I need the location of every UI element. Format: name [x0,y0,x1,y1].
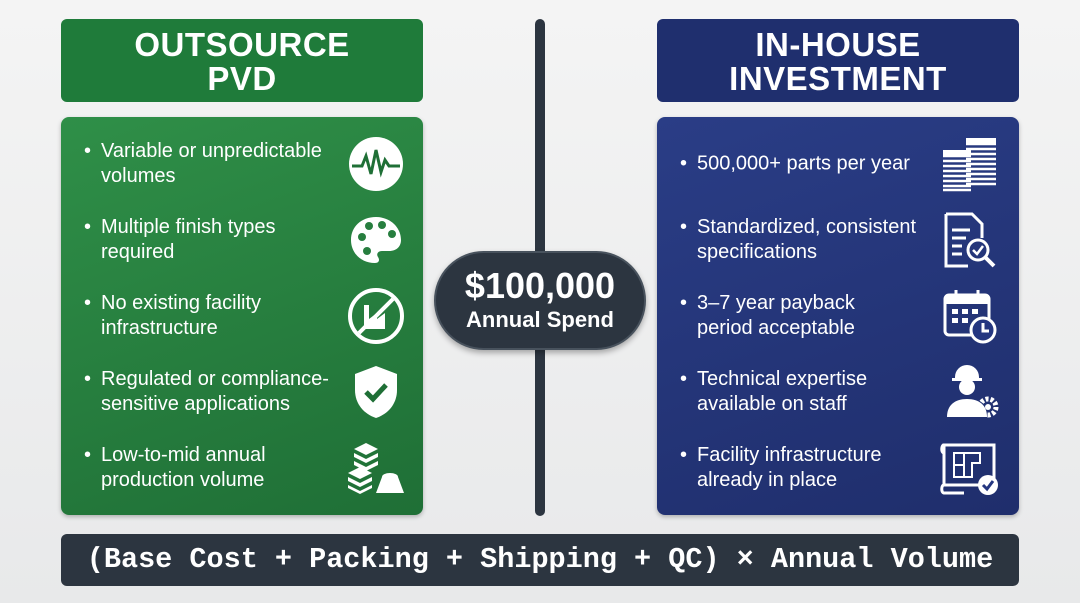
item: regulated: sensitive applications [101,393,290,415]
item: multiple finishes: Multiple finish types [101,216,276,238]
item: low-to-mid volume [84,443,404,494]
item: facility in place [680,444,998,495]
item: variable volumes: Variable or unpredictable [101,140,322,162]
icon: blueprint [940,444,998,495]
item: technical expertise: Technical expertise [697,368,867,390]
item: 500k parts [680,138,996,192]
panel: outsource [61,117,423,515]
panel: in-house [657,117,1019,515]
item: facility in place: already in place [697,469,837,491]
icon: shield [355,366,397,418]
item: payback: 3–7 year payback [697,292,855,314]
header: outsource: OUTSOURCE [134,26,350,63]
callout: annual spend pill: $100,000 [465,265,615,306]
icon: stacks [348,443,404,494]
header: in-house [657,19,1019,102]
item: payback [680,290,996,344]
icon: no factory [348,288,404,344]
item: no facility: No existing facility [101,292,261,314]
icon: document check [944,212,996,268]
item: variable volumes [84,137,403,191]
item: low-to-mid volume: Low-to-mid annual [101,444,266,466]
item: regulated: Regulated or compliance- [101,368,329,390]
item: multiple finishes: required [101,241,174,263]
header: outsource [61,19,423,102]
item: payback: period acceptable [697,317,855,339]
formula bar: (Base Cost + Packing + Shipping + QC) × Annual Volume [87,543,993,576]
icon: pulse [349,137,403,191]
icon: engineer [947,365,998,418]
item: variable volumes: volumes [101,165,175,187]
header: in-house: IN-HOUSE [755,26,921,63]
header: outsource: PVD [207,60,277,97]
item: technical expertise [680,365,998,418]
header: in-house: INVESTMENT [729,60,947,97]
item: standardized specs: Standardized, consistent [697,216,916,238]
icon: calendar clock [944,290,996,344]
item: regulated [84,366,397,418]
item: low-to-mid volume: production volume [101,469,264,491]
item: multiple finishes [84,216,401,263]
item: no facility [84,288,404,344]
item: 500k parts: 500,000+ parts per year [697,152,910,174]
callout: annual spend pill [434,251,646,350]
callout: annual spend pill: Annual Spend [466,307,614,332]
formula bar [61,534,1019,586]
item: standardized specs [680,212,996,268]
icon: money stacks [943,138,996,192]
icon: palette [351,217,401,263]
center divider line [535,19,545,516]
item: facility in place: Facility infrastructure [697,444,882,466]
item: no facility: infrastructure [101,317,218,339]
item: standardized specs: specifications [697,241,817,263]
item: technical expertise: available on staff [697,393,847,415]
